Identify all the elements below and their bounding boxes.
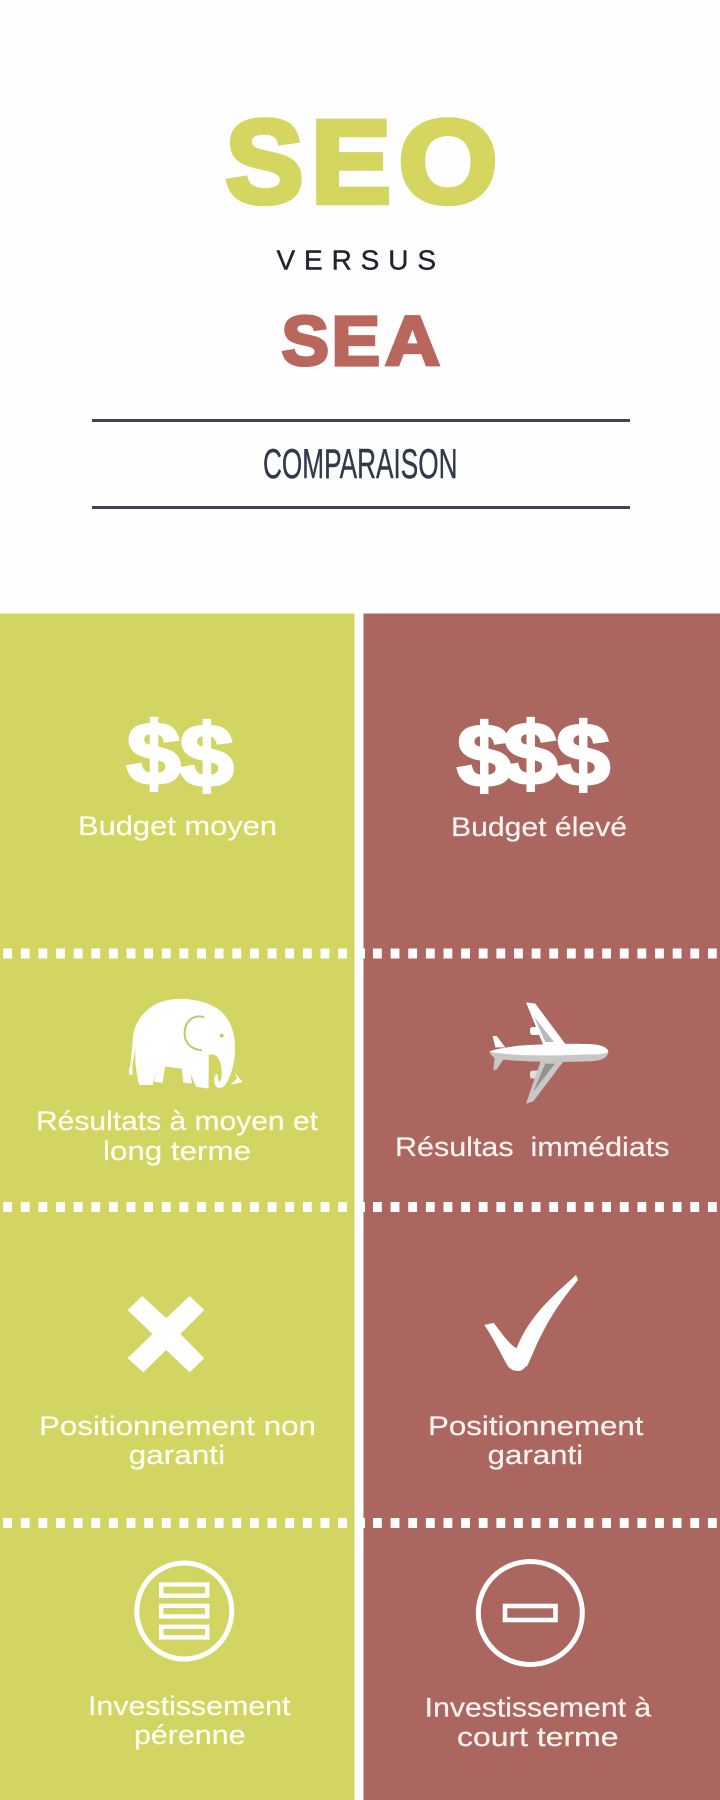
label: investissement a court terme: Investissement à <box>425 1692 652 1722</box>
title: SEO: O <box>398 96 498 228</box>
label: investissement a court terme: court terme <box>457 1722 618 1752</box>
heading: comparaison with rules <box>92 419 630 509</box>
label: positionnement garanti: garanti <box>488 1440 583 1470</box>
label: positionnement non garanti <box>39 1411 316 1470</box>
label: investissement perenne: Investissement <box>88 1691 291 1721</box>
centre gap <box>354 614 363 1800</box>
panel: SEA column <box>364 614 720 1800</box>
label: resultats moyen et long terme: Résultats à moyen et <box>36 1106 319 1136</box>
icon: cross <box>128 1296 204 1372</box>
icon: three dollars: $ <box>556 705 610 804</box>
title: SEO: E <box>311 96 391 228</box>
heading: comparaison with rules: COMPARAISON <box>263 440 458 487</box>
title: SEA: A <box>385 302 440 380</box>
label: positionnement garanti <box>428 1411 644 1470</box>
icon: three dollars: $ <box>504 704 558 803</box>
label: resultats moyen et long terme <box>36 1106 319 1166</box>
title: SEA <box>282 302 440 380</box>
label: investissement a court terme <box>425 1692 652 1752</box>
icon: airplane <box>489 1002 608 1104</box>
title: SEA: S <box>282 302 329 380</box>
title: SEO: S <box>226 96 304 228</box>
icon: two dollars <box>127 704 234 805</box>
icon: elephant <box>129 999 243 1089</box>
icon: check mark <box>484 1275 578 1371</box>
title: SEA: E <box>332 302 380 380</box>
label: resultats moyen et long terme: long terme <box>103 1136 251 1166</box>
label: positionnement garanti: Positionnement <box>428 1411 644 1441</box>
label: resultas immediats: Résultas immédiats <box>395 1132 670 1162</box>
subtitle: versus: VERSUS <box>276 244 436 276</box>
icon: three dollars <box>457 704 610 805</box>
label: positionnement non garanti: garanti <box>129 1440 225 1470</box>
dotted row divider 2 <box>3 1202 720 1212</box>
panel: SEO column <box>0 614 354 1800</box>
label: investissement perenne: pérenne <box>134 1720 246 1750</box>
icon: three dollars: $ <box>457 706 511 805</box>
icon: circle with one bar <box>478 1562 582 1664</box>
dotted row divider 1 <box>3 948 720 958</box>
label: positionnement non garanti: Positionnement non <box>39 1411 316 1441</box>
icon: two dollars: $ <box>180 706 234 805</box>
label: investissement perenne <box>88 1691 291 1750</box>
title: SEO <box>226 96 498 228</box>
icon: two dollars: $ <box>127 704 181 803</box>
dotted row divider 3 <box>3 1518 720 1528</box>
label: budget eleve: Budget élevé <box>451 812 627 842</box>
icon: circle with three bars <box>137 1563 232 1659</box>
label: budget moyen: Budget moyen <box>78 811 277 841</box>
